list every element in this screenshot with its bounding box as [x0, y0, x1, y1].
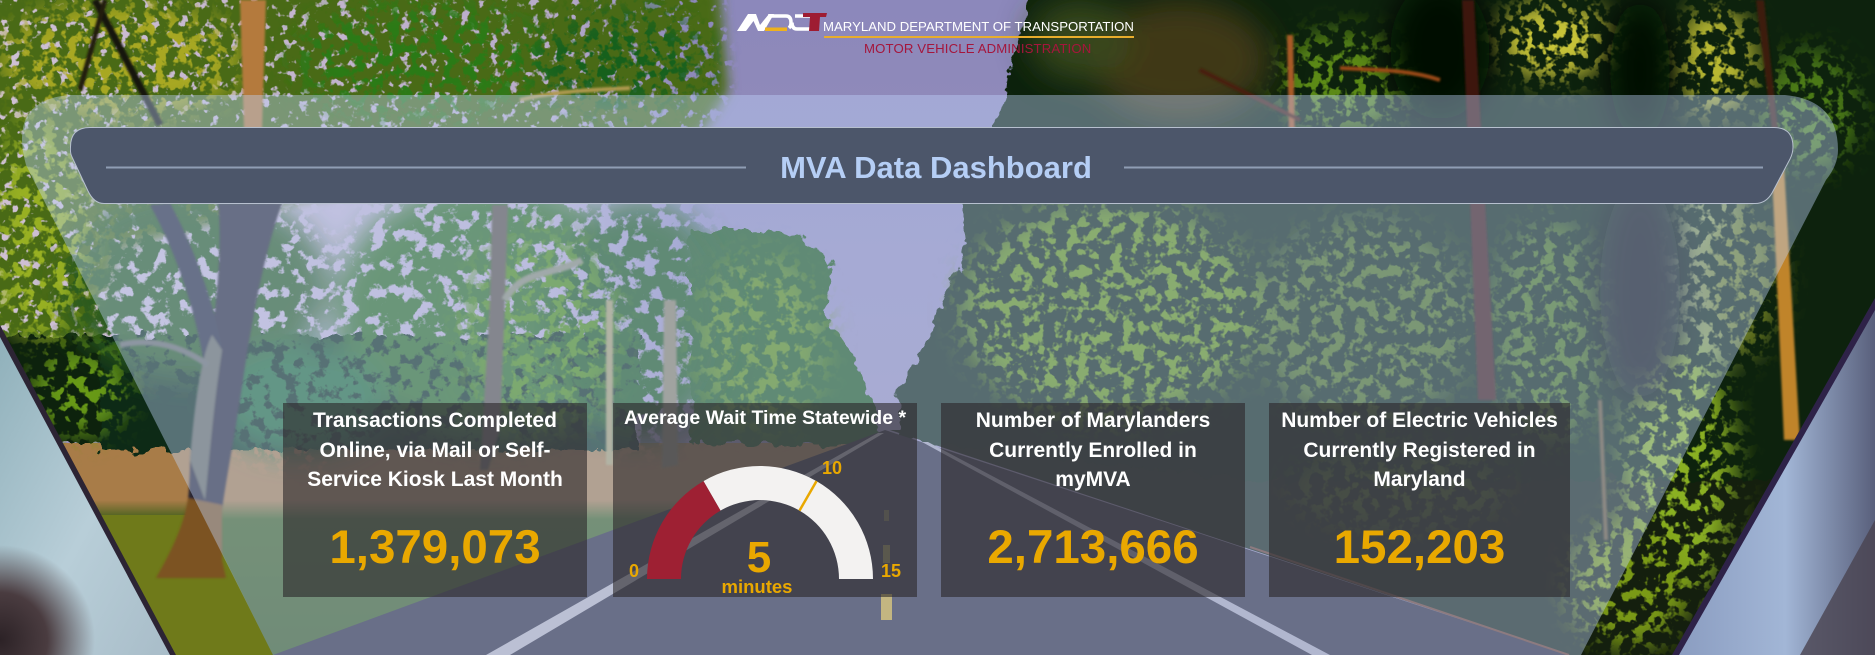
text: department name: MARYLAND DEPARTMENT OF TRANSPORTATION: [823, 19, 1134, 34]
big number: 2,713,666: [987, 521, 1199, 574]
card heading: Service Kiosk Last Month: [307, 468, 563, 491]
card heading: Number of Marylanders: [976, 409, 1210, 432]
gauge chart: 10: [822, 458, 842, 478]
card heading: Transactions Completed: [313, 409, 557, 432]
card: myMVA enrollment: [941, 403, 1245, 597]
card: electric vehicles: [1269, 403, 1570, 597]
card heading: Number of Electric Vehicles: [1281, 409, 1558, 432]
card heading: Currently Registered in: [1303, 438, 1536, 462]
gauge chart: 15: [881, 561, 901, 581]
logo: Maryland Department of Transportation, Motor Vehicle Administration: [737, 13, 1134, 56]
card heading: myMVA: [1055, 468, 1131, 491]
foliage: left canopy and trees: [0, 0, 728, 345]
card heading: Average Wait Time Statewide *: [624, 407, 906, 429]
card: average wait time gauge: [613, 403, 917, 597]
gauge chart: 0: [629, 561, 639, 581]
card heading: [1281, 409, 1558, 491]
road: [273, 430, 1569, 655]
card heading: [976, 409, 1210, 491]
title: MVA Data Dashboard: [780, 150, 1092, 185]
big number: 152,203: [1334, 521, 1505, 574]
icon: MDOT wordmark: [737, 13, 827, 31]
text: administration name: MOTOR VEHICLE ADMINISTRATION: [864, 41, 1091, 56]
card heading: Maryland: [1373, 468, 1466, 491]
gauge chart: 5: [747, 533, 771, 582]
ground: [0, 430, 1875, 655]
gauge chart: [629, 458, 901, 595]
big number: 1,379,073: [329, 521, 541, 574]
car window pillars: [0, 298, 1875, 655]
card: online transactions: [283, 403, 587, 597]
card heading: Online, via Mail or Self-: [319, 438, 551, 462]
card heading: [307, 409, 563, 491]
header bar: [70, 127, 1794, 204]
card heading: Currently Enrolled in: [989, 438, 1197, 462]
